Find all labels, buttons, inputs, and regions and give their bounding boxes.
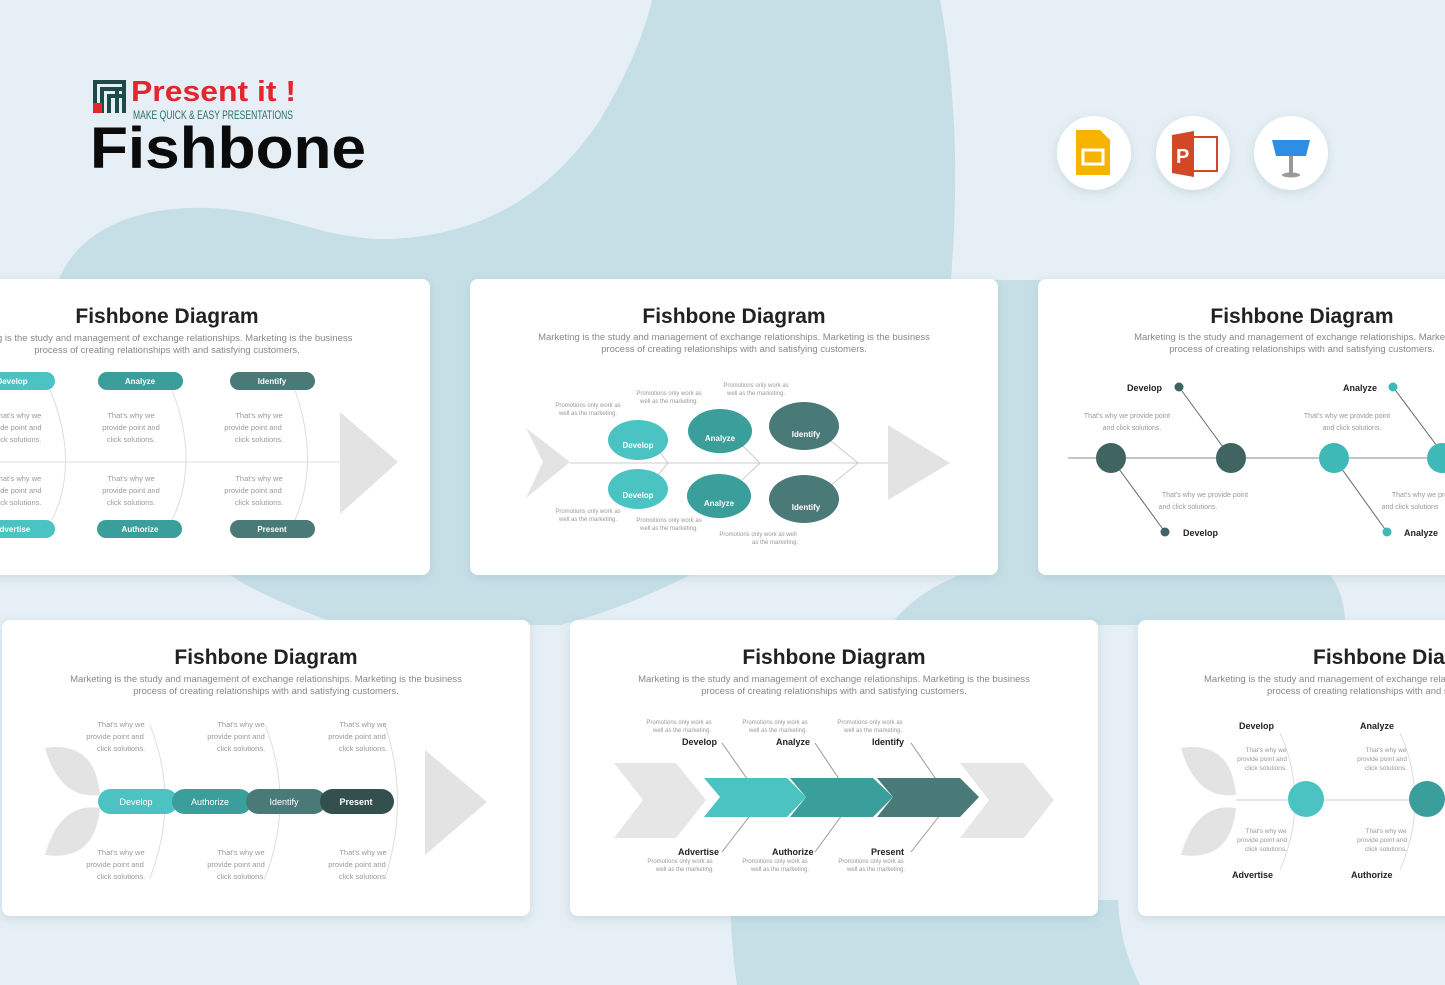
slide 2: Identify — [792, 503, 821, 512]
slide 1: Authorize — [122, 525, 159, 534]
slide 6: That's why we — [1246, 747, 1287, 754]
slide 1: Analyze — [125, 377, 156, 386]
slide 3: Analyze — [1343, 383, 1377, 393]
slide 5: Promotions only work as — [742, 720, 808, 726]
slide 2: Promotions only work as — [636, 518, 702, 524]
slide 1: That's why we — [235, 411, 283, 420]
slide 3: Develop — [1183, 528, 1219, 538]
slide 5: well as the marketing. — [750, 867, 809, 873]
title: Fishbone — [90, 116, 366, 181]
slide 6: provide point and — [1237, 837, 1287, 844]
slide 1: click solutions. — [235, 435, 283, 444]
slide 4: click solutions. — [339, 872, 387, 881]
slide 5: Authorize — [772, 847, 814, 857]
slide 4: provide point and — [207, 732, 265, 741]
slide 6: Develop — [1239, 721, 1275, 731]
slide 6: click solutions. — [1245, 765, 1287, 772]
slide 1: click solutions. — [107, 498, 155, 507]
slide 6: That's why we — [1366, 828, 1407, 835]
slide 2: Promotions only work as — [723, 383, 789, 389]
slide 2: as the marketing. — [752, 540, 798, 546]
slide 5: Develop — [682, 737, 718, 747]
slide 4: That's why we — [339, 720, 387, 729]
slide 2: Marketing is the study and management of exchange relationships. Marketing is the business — [538, 332, 930, 343]
slide 6: click solutions. — [1245, 846, 1287, 853]
slide 2: Develop — [622, 491, 654, 500]
slide 5: Promotions only work as — [647, 859, 713, 865]
slide 5: well as the marketing. — [652, 728, 711, 734]
logo: MAKE QUICK & EASY PRESENTATIONS — [133, 108, 293, 122]
slide 1: Identify — [258, 377, 287, 386]
slide 4: click solutions. — [97, 872, 145, 881]
slide 6: click solutions. — [1365, 765, 1407, 772]
slide 5: well as the marketing. — [843, 728, 902, 734]
slide 1: Present — [257, 525, 287, 534]
slide 3: That's why we provide point — [1162, 492, 1248, 499]
slide 2: well as the marketing. — [639, 526, 698, 532]
icons: app badges — [1057, 116, 1328, 190]
slide 3: and click solutions — [1382, 504, 1439, 511]
slide 2: Fishbone Diagram — [642, 305, 826, 328]
slide 3: That's why we provide point — [1084, 413, 1170, 420]
slide 4: click solutions. — [97, 744, 145, 753]
slide 4: That's why we — [217, 848, 265, 857]
slide 3 — [1038, 279, 1445, 575]
slide 1: Fishbone Diagram — [75, 305, 259, 328]
slide 2: Promotions only work as well — [719, 532, 797, 538]
slide 4: process of creating relationships with and satisfying customers. — [133, 686, 399, 697]
slide 4: Present — [339, 797, 373, 807]
slide 5 — [570, 620, 1098, 916]
slide 1: provide point and — [102, 423, 160, 432]
slide 1: process of creating relationships with and satisfying customers. — [34, 345, 300, 356]
slide 4: That's why we — [97, 720, 145, 729]
slide 5: Promotions only work as — [742, 859, 808, 865]
slide 3: and click solutions. — [1103, 425, 1161, 432]
slide 4: Develop — [119, 797, 153, 807]
logo: Present it ! — [131, 76, 296, 108]
slide 5: Analyze — [776, 737, 810, 747]
slide 3: and click solutions. — [1159, 504, 1217, 511]
slide 5: Advertise — [678, 847, 719, 857]
slide 4: provide point and — [328, 732, 386, 741]
slide 4: provide point and — [207, 860, 265, 869]
slide 6: Analyze — [1360, 721, 1394, 731]
slide 2: process of creating relationships with and satisfying customers. — [601, 344, 867, 355]
slide 2: Analyze — [704, 499, 735, 508]
slide 4: That's why we — [97, 848, 145, 857]
slide 4: Marketing is the study and management of exchange relationships. Marketing is the business — [70, 674, 462, 685]
slide 6: Authorize — [1351, 870, 1392, 880]
slide 5: Present — [871, 847, 904, 857]
slide 5: Promotions only work as — [837, 720, 903, 726]
slide 4: That's why we — [339, 848, 387, 857]
slide 1: That's why we — [107, 474, 155, 483]
slide 2: well as the marketing. — [558, 411, 617, 417]
slide 1: provide point and — [102, 486, 160, 495]
slide 5: well as the marketing. — [748, 728, 807, 734]
logo — [93, 76, 296, 122]
slide 5: Promotions only work as — [646, 720, 712, 726]
slide 6: provide point and — [1357, 756, 1407, 763]
slide 3: That's why we provide point — [1304, 413, 1390, 420]
slide 5: well as the marketing. — [655, 867, 714, 873]
slide 1: That's why we — [107, 411, 155, 420]
slide 1: provide point and — [224, 423, 282, 432]
slide 1: provide point and — [224, 486, 282, 495]
slide 5: Identify — [872, 737, 904, 747]
slide 2: Promotions only work as — [555, 403, 621, 409]
slide 2: Identify — [792, 430, 821, 439]
slide 1: click solutions. — [235, 498, 283, 507]
slide 2: Promotions only work as — [636, 391, 702, 397]
slide 4: That's why we — [217, 720, 265, 729]
slide 4: Fishbone Diagram — [174, 646, 358, 669]
slide 5: Promotions only work as — [838, 859, 904, 865]
slide 3: Fishbone Diagram — [1210, 305, 1394, 328]
slide 4: click solutions. — [217, 744, 265, 753]
slide 3: and click solutions. — [1323, 425, 1381, 432]
slide 5: well as the marketing. — [846, 867, 905, 873]
slide 4: provide point and — [86, 860, 144, 869]
slide 4: click solutions. — [339, 744, 387, 753]
slide 4: Authorize — [191, 797, 229, 807]
slide 5: Fishbone Diagram — [742, 646, 926, 669]
slide 2: Promotions only work as — [555, 509, 621, 515]
icon: logo mark — [93, 80, 126, 113]
slide 6: provide point and — [1237, 756, 1287, 763]
slide 4: provide point and — [328, 860, 386, 869]
icons: app badges: P — [1176, 146, 1189, 168]
slide 4: Identify — [269, 797, 299, 807]
slide 2: well as the marketing. — [558, 517, 617, 523]
slide 5: process of creating relationships with and satisfying customers. — [701, 686, 967, 697]
slide 3: Develop — [1127, 383, 1163, 393]
slide 3: process of creating relationships with and satisfying customers. — [1169, 344, 1435, 355]
slide 1: click solutions. — [107, 435, 155, 444]
slide 2: well as the marketing. — [639, 399, 698, 405]
slide 1: That's why we — [235, 474, 283, 483]
slide 6: That's why we — [1366, 747, 1407, 754]
slide 2: well as the marketing. — [726, 391, 785, 397]
slide 6: provide point and — [1357, 837, 1407, 844]
slide 4: provide point and — [86, 732, 144, 741]
slide 2 — [470, 279, 998, 575]
slide 6: Advertise — [1232, 870, 1273, 880]
slide 6 — [1138, 620, 1445, 916]
slide 6: That's why we — [1246, 828, 1287, 835]
slide 5: Marketing is the study and management of exchange relationships. Marketing is the business — [638, 674, 1030, 685]
slide 4 — [2, 620, 530, 916]
slide 2: Develop — [622, 441, 654, 450]
slide 1 — [0, 279, 430, 575]
slide 6: click solutions. — [1365, 846, 1407, 853]
slide 3: Analyze — [1404, 528, 1438, 538]
slide 2: Analyze — [705, 434, 736, 443]
slide 4: click solutions. — [217, 872, 265, 881]
